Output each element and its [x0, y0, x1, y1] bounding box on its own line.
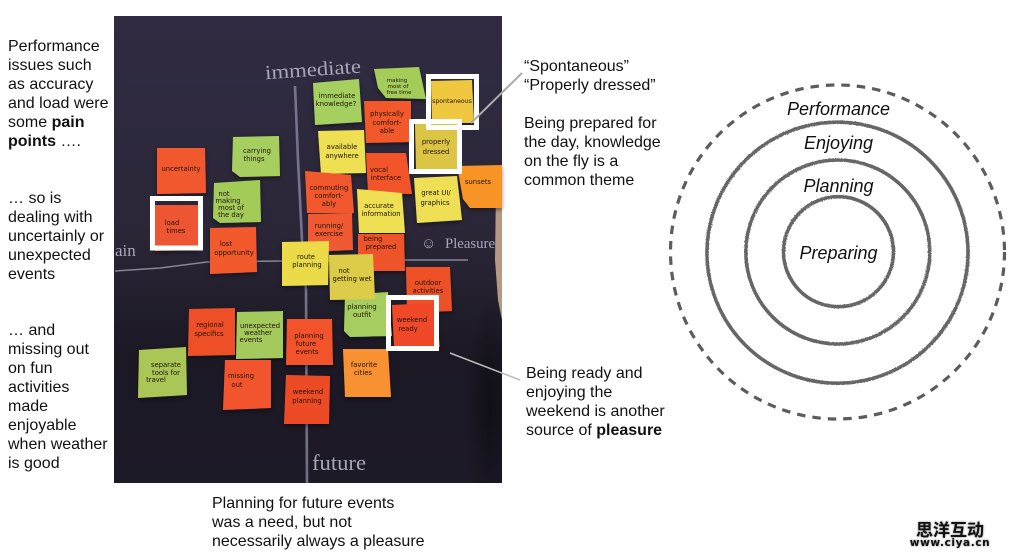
sticky: planning future events — [286, 319, 333, 365]
sticky: not getting wet — [329, 254, 375, 300]
highlight frame: load times — [152, 198, 200, 248]
text block: pain points: as accuracy — [8, 76, 93, 93]
text block: missing out — [8, 322, 108, 472]
callout: weekend pleasure — [526, 365, 665, 439]
chalk axes and labels — [115, 56, 495, 483]
sticky: lost opportunity: lost — [220, 240, 232, 248]
sticky: weekend ready — [392, 303, 440, 347]
label: Planning: Planning — [803, 176, 874, 196]
sticky: not making most of the day: making — [215, 197, 241, 205]
text block: pain points: points …. — [8, 133, 81, 150]
sticky: great UI graphics — [414, 176, 462, 223]
sticky: lost opportunity: opportunity — [214, 249, 254, 257]
sticky: making most of free time: making — [387, 78, 407, 84]
ring: planning — [746, 160, 930, 344]
sticky: planning future events: future — [296, 340, 316, 348]
sticky: uncertainty: uncertainty — [161, 165, 201, 173]
sticky: weekend ready: weekend — [397, 316, 427, 324]
ring: performance — [670, 85, 1004, 419]
sticky: carrying things: carrying — [243, 147, 271, 155]
sticky: weekend ready: ready — [398, 325, 418, 333]
sticky: load times: times — [167, 227, 186, 235]
sticky: separate tools for travel — [138, 347, 187, 398]
sticky: regional specifics — [188, 308, 235, 356]
sticky: unexpected weather events — [236, 311, 283, 359]
text block: missing out: missing out — [8, 341, 89, 358]
callout: being prepared: on the fly is a — [524, 153, 618, 170]
text block: pain points: Performance — [8, 38, 100, 55]
ring: enjoying — [707, 122, 968, 383]
sticky: great UI graphics: graphics — [420, 199, 450, 207]
sticky: planning outfit: outfit — [353, 311, 371, 319]
sticky: separate tools for travel: travel — [146, 376, 166, 384]
sticky: commuting comfortably: commuting — [310, 184, 348, 192]
highlight frame: spontaneous — [428, 76, 476, 128]
sticky: weekend planning — [284, 375, 330, 424]
text block: pain points: and load were — [8, 95, 109, 112]
chalk axes and labels: immediate — [264, 56, 362, 84]
sticky: running exercise: exercise — [315, 230, 343, 238]
sticky: being prepared: prepared — [366, 243, 396, 251]
text block: uncertainty — [8, 190, 104, 283]
sticky: immediate knowledge: immediate — [319, 92, 355, 100]
sticky: route planning: route — [297, 253, 315, 261]
sticky: available anywhere: available — [327, 143, 357, 151]
sticky: sunsets: sunsets — [465, 178, 491, 186]
sticky: accurate information: information — [361, 210, 401, 218]
sticky: load times — [155, 205, 198, 251]
sticky: spontaneous: spontaneous — [432, 98, 472, 105]
callout: being prepared: the day, knowledge — [524, 134, 661, 151]
text block: missing out: when weather — [8, 436, 108, 453]
sticky: weekend planning: weekend — [293, 388, 323, 396]
sticky: commuting comfortably — [305, 171, 354, 213]
sticky: planning outfit: planning — [347, 303, 377, 311]
sticky: favorite cities — [343, 349, 391, 397]
sticky: outdoor activities — [406, 267, 452, 313]
sticky: regional specifics: regional — [196, 321, 224, 329]
watermark logo — [909, 516, 990, 549]
text block: uncertainty: uncertainly or — [8, 228, 104, 245]
chalk axes and labels: future — [312, 450, 366, 475]
text block: missing out: … and — [8, 322, 55, 339]
sticky: physically comfortable: physically — [370, 110, 404, 118]
sticky: commuting comfortably: comfort- — [315, 192, 344, 200]
sticky: spontaneous — [431, 80, 474, 123]
callout: weekend pleasure: weekend is another — [526, 403, 665, 420]
ring: preparing — [784, 197, 894, 307]
sticky: favorite cities: cities — [354, 369, 372, 377]
sticky: vocal interface — [366, 153, 412, 194]
sticky: unexpected weather events: events — [240, 336, 263, 344]
caption: planning for future events: necessarily always a pleasure — [212, 533, 425, 550]
sticky: carrying things — [232, 136, 280, 177]
sticky: separate tools for travel: separate — [151, 361, 181, 369]
sticky: carrying things: things — [243, 155, 265, 163]
callout: being prepared: common theme — [524, 172, 634, 189]
chalk axes and labels: ain — [115, 241, 136, 260]
sticky: properly dressed: dressed — [423, 148, 449, 156]
sticky: running exercise: running/ — [315, 222, 344, 230]
sticky: properly dressed — [415, 124, 457, 169]
sticky: accurate information — [357, 189, 405, 233]
text block: missing out: enjoyable — [8, 417, 76, 434]
sticky: missing out: out — [231, 381, 243, 389]
text block: uncertainty: events — [8, 266, 55, 283]
leader line: top callout — [471, 73, 522, 123]
callout: spontaneous and properly dressed: “Properly dressed” — [524, 77, 656, 94]
sticky: immediate knowledge: knowledge? — [316, 100, 357, 108]
sticky: not making most of the day: most of — [218, 204, 244, 212]
sticky: making most of free time — [374, 67, 426, 99]
sticky: making most of free time: most of — [388, 84, 409, 90]
sticky: being prepared — [358, 234, 405, 271]
callout: spontaneous and properly dressed: “Spontaneous” — [524, 58, 629, 75]
chalk axes and labels: ☺ — [421, 236, 436, 252]
sticky: planning outfit — [344, 292, 392, 337]
leader line: bottom callout — [450, 353, 520, 380]
sticky: physically comfortable: able — [380, 127, 394, 135]
sticky: physically comfortable — [364, 101, 411, 143]
highlight frame: weekend ready — [388, 298, 436, 348]
sticky: making most of free time: free time — [386, 90, 412, 96]
callout: being prepared: Being prepared for — [524, 115, 657, 132]
sticky: accurate information: accurate — [364, 202, 394, 210]
text block: uncertainty: … so is — [8, 190, 61, 207]
text block: uncertainty: unexpected — [8, 247, 91, 264]
sticky: sunsets — [457, 165, 502, 208]
sticky: weekend planning: planning — [292, 397, 322, 405]
sticky: uncertainty — [157, 148, 206, 194]
sticky: missing out — [223, 360, 271, 410]
label: Enjoying: Enjoying — [804, 133, 873, 153]
sticky: unexpected weather events: weather — [244, 329, 272, 337]
sticky: immediate knowledge — [313, 79, 362, 125]
sticky: available anywhere — [318, 130, 366, 174]
watermark logo: 思洋互动 — [916, 516, 984, 541]
sticky: outdoor activities: outdoor — [415, 279, 441, 287]
text block: pain points: some pain — [8, 114, 84, 131]
text block: pain points: issues such — [8, 57, 92, 74]
sticky: favorite cities: favorite — [351, 361, 377, 369]
sticky: route planning: planning — [292, 261, 322, 269]
sticky: missing out: missing — [228, 372, 254, 380]
sticky: planning future events: events — [296, 348, 319, 356]
sticky: not making most of the day: not — [218, 190, 230, 198]
label: Preparing: Preparing — [799, 243, 878, 263]
sticky: regional specifics: specifics — [194, 330, 224, 338]
sticky: not making most of the day — [213, 180, 261, 223]
chalk axes and labels: Pleasure — [445, 236, 495, 252]
sticky: vocal interface: interface — [371, 174, 401, 182]
sticky: not getting wet: getting wet — [333, 275, 372, 283]
callout: weekend pleasure: source of pleasure — [526, 422, 662, 439]
chalkboard background — [114, 16, 502, 483]
text block: missing out: on fun — [8, 360, 52, 377]
label: Performance: Performance — [787, 99, 890, 119]
sticky: physically comfortable: comfort- — [373, 119, 402, 127]
sticky: separate tools for travel: tools for — [152, 369, 180, 377]
sticky: commuting comfortably: ably — [322, 200, 336, 208]
sticky: planning future events: planning — [294, 332, 324, 340]
text block: pain points — [8, 38, 109, 150]
caption: planning for future events: was a need, but not — [212, 514, 352, 531]
caption: planning for future events: Planning for future events — [212, 495, 394, 512]
sticky: outdoor activities: activities — [413, 287, 444, 295]
sticky: being prepared: being — [363, 235, 383, 243]
callout: weekend pleasure: enjoying the — [526, 384, 612, 401]
sticky: load times: load — [165, 219, 179, 227]
sticky: unexpected weather events: unexpected — [240, 322, 280, 330]
sticky: available anywhere: anywhere — [325, 152, 359, 160]
sticky: route planning — [282, 241, 329, 286]
text block: missing out: activities — [8, 379, 69, 396]
circle diagram: rings — [670, 85, 1004, 419]
callout: weekend pleasure: Being ready and — [526, 365, 643, 382]
sticky: not making most of the day: the day — [218, 211, 244, 219]
callout: being prepared — [524, 115, 661, 189]
text block: missing out: made — [8, 398, 48, 415]
sticky: running exercise — [308, 213, 353, 252]
sticky: properly dressed: properly — [422, 138, 450, 146]
sticky: lost opportunity — [210, 227, 257, 274]
watermark logo: www.ciya.cn — [910, 537, 990, 549]
sticky: great UI graphics: great UI/ — [421, 189, 451, 197]
highlight frame: properly dressed — [412, 122, 460, 172]
sticky: not getting wet: not — [338, 267, 350, 275]
arm at right edge — [495, 178, 502, 320]
sticky: vocal interface: vocal — [370, 166, 388, 174]
caption: planning for future events — [212, 495, 425, 550]
text block: missing out: is good — [8, 455, 60, 472]
text block: uncertainty: dealing with — [8, 209, 92, 226]
callout: spontaneous and properly dressed — [524, 58, 656, 94]
